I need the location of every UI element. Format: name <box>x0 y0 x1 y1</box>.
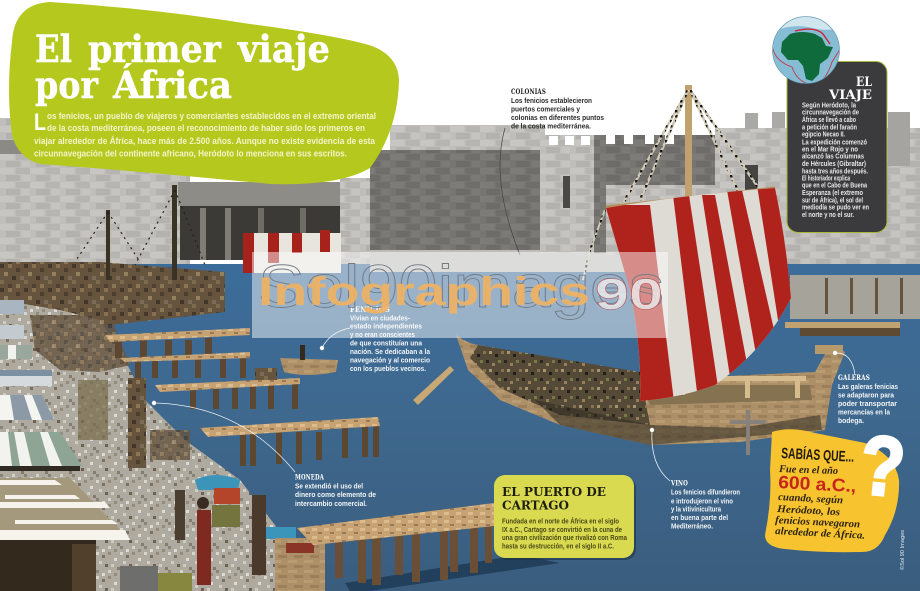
el viaje heading: VIAJE <box>828 88 872 103</box>
puerto text: IX a.C., Cartago se convirtió en la cuna de <box>502 525 622 534</box>
icon: question mark: ? <box>856 417 909 515</box>
big pier <box>297 503 560 591</box>
caption: moneda: Se extendió el uso del <box>295 482 363 490</box>
puerto text <box>502 516 628 550</box>
caption: galeras: GALERAS <box>838 373 870 382</box>
distant striped sail <box>243 230 341 273</box>
sabías text: cuando, según <box>778 492 843 506</box>
title heading: por <box>35 63 98 107</box>
intro paragraph: os fenicios, un pueblo de viajeros y comerciantes establecidos en el extremo oriental <box>47 111 376 121</box>
caption: galeras: poder transportar <box>838 399 897 408</box>
watermark overlay <box>252 252 668 338</box>
panel: sabías que <box>765 417 909 552</box>
puerto text: una gran civilización que rivalizó con Roma <box>502 533 628 542</box>
el viaje text: alcanzó las Columnas <box>802 154 864 160</box>
sabías text: Fue en el año <box>778 464 838 477</box>
el viaje heading: EL <box>856 75 872 90</box>
title heading <box>35 27 330 107</box>
caption: moneda: intercambio comercial. <box>295 499 367 508</box>
caption: galeras: se adaptaron para <box>838 390 895 400</box>
panel: el viaje <box>787 62 887 232</box>
caption: galeras: mercancías en la <box>838 408 891 416</box>
hull <box>456 335 845 445</box>
el viaje text: egipcio Necao II. <box>802 132 845 138</box>
puerto text: hasta su destrucción, en el siglo II a.C. <box>502 542 614 550</box>
intro paragraph: de la costa mediterránea, poseen el reconocimiento de haber sido los primeros en <box>47 123 365 133</box>
el viaje text <box>802 102 869 219</box>
el viaje text: África se llevó a cabo <box>802 115 856 124</box>
caption: colonias: de la costa mediterránea. <box>511 122 591 130</box>
caption: fenicios (behind watermark): Vivían en ciudades- <box>350 314 410 322</box>
caption: vino: y la vitivinicultura <box>671 504 722 514</box>
caption: vino: Los fenicios difundieron <box>671 488 740 496</box>
title heading: primer <box>88 27 221 71</box>
el viaje text: a petición del faraón <box>802 124 857 132</box>
panel: el puerto de Cartago <box>494 475 636 560</box>
quay <box>0 300 310 591</box>
left ship and masts <box>0 185 225 330</box>
caption: vino: e introdujeron el vino <box>671 496 733 506</box>
puerto heading: EL PUERTO DE <box>502 484 606 499</box>
title heading: viaje <box>237 27 330 71</box>
caption: moneda: MONEDA <box>295 472 324 482</box>
el viaje text: de Hércules (Gibraltar) <box>802 161 866 168</box>
el viaje text: Según Heródoto, la <box>802 102 856 110</box>
wooden docks <box>105 328 560 591</box>
caption: fenicios (behind watermark): estado independientes <box>350 322 422 330</box>
water <box>0 264 920 591</box>
main galley <box>413 85 845 455</box>
watermark overlay: Sol90images <box>258 253 664 320</box>
caption: galeras: bodega. <box>838 416 864 425</box>
el viaje text: circunnavegación de <box>802 110 859 116</box>
callout lines <box>154 328 855 481</box>
striped sail <box>606 188 791 401</box>
caption: moneda: dinero como elemento de <box>295 490 376 499</box>
caption: fenicios (behind watermark): FENICIOS <box>350 305 390 314</box>
puerto heading <box>502 484 606 512</box>
goods and figures <box>120 475 325 591</box>
caption: fenicios (behind watermark): navegación y al comercio <box>350 356 430 364</box>
caption: galeras <box>838 373 898 425</box>
watermark overlay: Infographics <box>258 270 590 314</box>
intro paragraph: viajar alrededor de África, hace más de 2.500 años. Aunque no existe evidencia de esta <box>34 136 376 146</box>
el viaje text: en el Mar Rojo y no <box>802 146 858 154</box>
caption: vino: en buena parte del <box>671 513 728 522</box>
sabías heading: SABÍAS QUE... <box>781 445 855 466</box>
mast and rigging <box>583 85 775 280</box>
caption: fenicios (behind watermark) <box>350 305 431 373</box>
small boats <box>255 345 338 380</box>
icon: globe with route around Africa <box>770 14 842 85</box>
el viaje text: La expedición comenzó <box>802 140 867 146</box>
title heading: África <box>112 63 232 107</box>
el viaje text: el norte y no el sur. <box>802 212 854 219</box>
intro paragraph <box>34 109 376 158</box>
puerto heading: CARTAGO <box>502 498 569 512</box>
caption: vino: Mediterráneo. <box>671 522 713 530</box>
sabías text <box>775 464 865 542</box>
caption: galeras: Las galeras fenicias <box>838 382 898 391</box>
crate <box>275 538 325 591</box>
intro paragraph: circunnavegación del continente africano, Heródoto lo menciona en sus escritos. <box>34 148 347 158</box>
city walls <box>0 112 920 275</box>
panel: title <box>9 2 399 184</box>
title heading: El <box>35 27 72 71</box>
cargo <box>470 345 650 425</box>
caption: fenicios (behind watermark): nación. Se dedicaban a la <box>350 347 431 356</box>
caption: colonias: COLONIAS <box>511 87 546 96</box>
caption: colonias: puertos comerciales y <box>511 104 581 114</box>
el viaje text: sur de África), el sol del <box>802 196 863 204</box>
market stalls <box>0 300 130 591</box>
el viaje text: El historiador explica <box>802 176 850 182</box>
caption: fenicios (behind watermark): de que constituían una <box>350 338 423 348</box>
caption: vino <box>670 478 740 530</box>
intro paragraph: L <box>34 109 46 136</box>
el viaje text: mediodía se pudo ver en <box>802 204 869 212</box>
caption: colonias: Los fenicios establecieron <box>511 96 592 105</box>
el viaje text: hasta tres años después. <box>802 168 868 176</box>
sabías text: Heródoto, los <box>776 504 840 518</box>
el viaje heading <box>828 75 872 103</box>
credit: ©Sol 90 Images <box>899 530 906 570</box>
sabías text: alrededor de África. <box>775 525 865 542</box>
el viaje text: Esperanza (el extremo <box>802 190 863 197</box>
caption: vino: VINO <box>670 478 688 488</box>
el viaje text: que en el Cabo de Buena <box>802 182 867 190</box>
watermark overlay: 90 <box>595 270 663 319</box>
caption: fenicios (behind watermark): y no eran conscientes <box>350 330 415 339</box>
puerto text: Fundada en el norte de África en el siglo <box>502 516 620 526</box>
caption: colonias: colonias en diferentes puntos <box>511 113 604 122</box>
oars <box>413 366 454 405</box>
caption: moneda <box>295 472 376 508</box>
sabías text: fenicios navegaron <box>775 515 860 530</box>
sabías text: 600 a.C., <box>778 472 857 496</box>
dark quay crowd <box>30 315 190 540</box>
caption: colonias <box>511 87 604 130</box>
caption: fenicios (behind watermark): con los pueblos vecinos. <box>350 364 426 373</box>
